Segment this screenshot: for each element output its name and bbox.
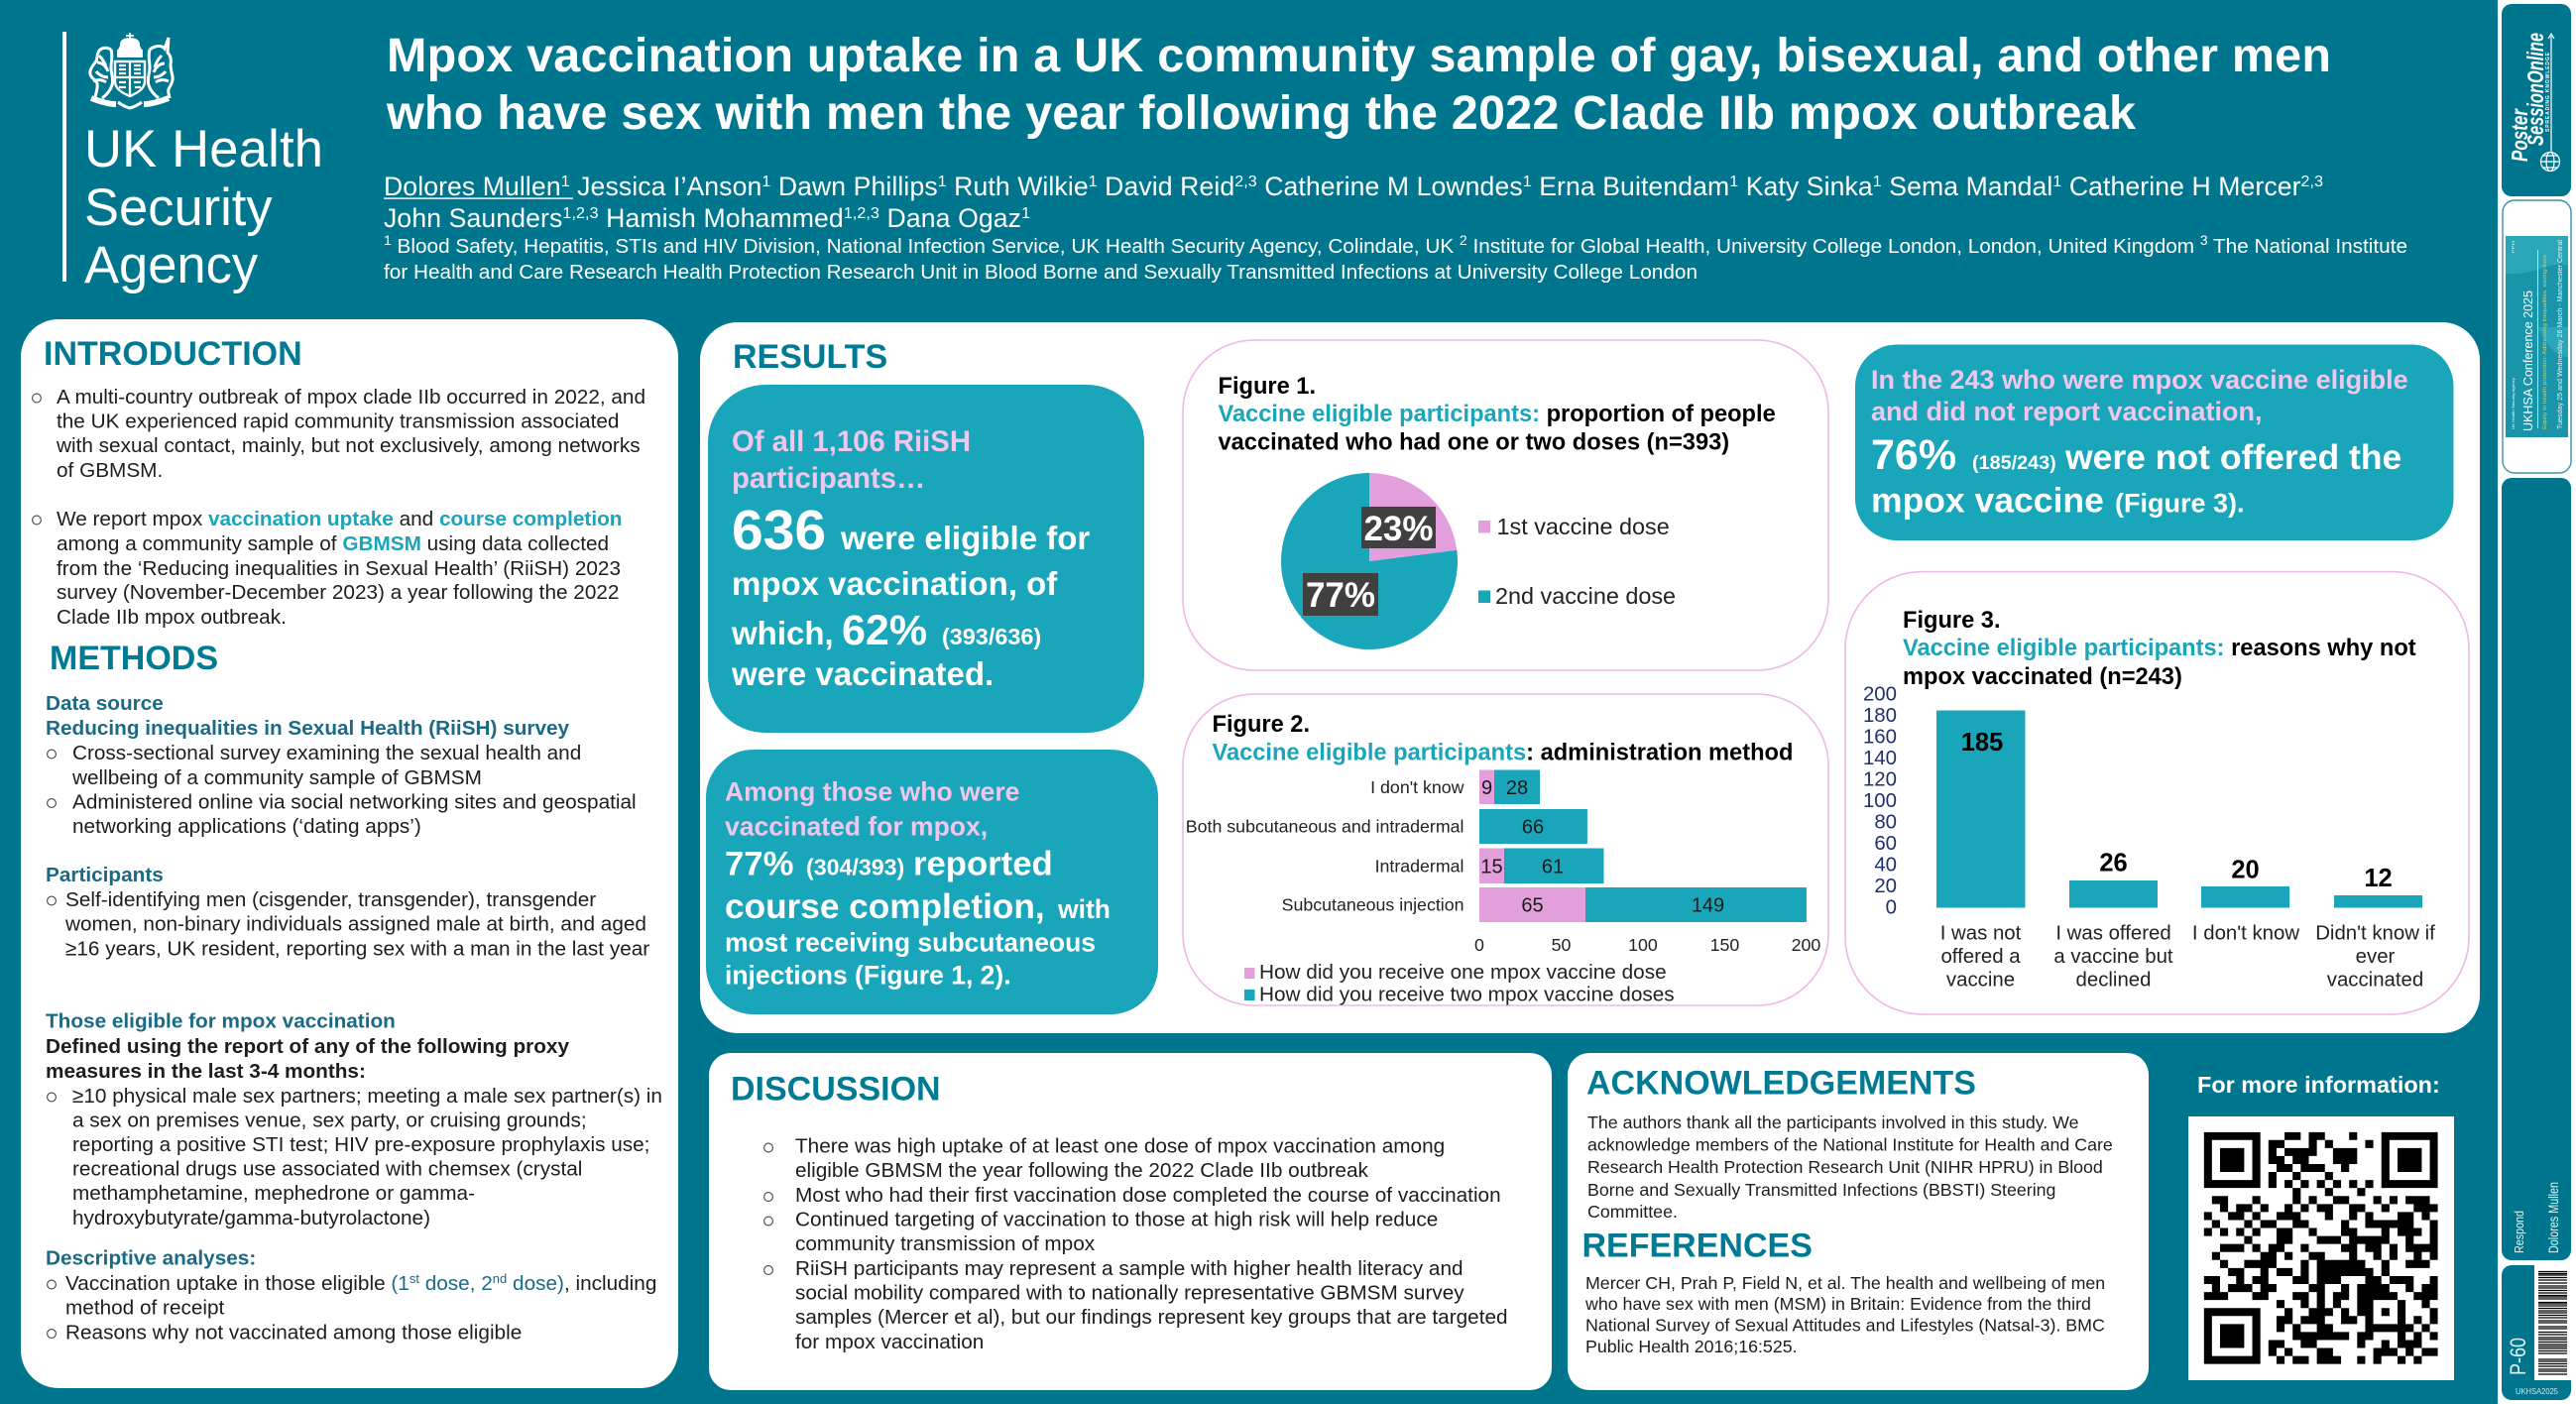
callout: 77% course completion: course completion, [725,887,1045,926]
callout: 76% not offered: (Figure 3). [2115,488,2245,518]
stacked bar chart: 0 [1474,935,1484,955]
callout: 77% course completion: (304/393) [806,855,904,880]
methods: participants: Participants [46,864,164,886]
callout: 76% not offered: In the 243 who were mpox vaccine eligible [1871,365,2408,395]
figure 1 heading: Vaccine eligible participants: proportion of people [1218,402,1776,427]
discussion bullets: Continued targeting of vaccination to those at high risk will help reduce [795,1208,1438,1231]
logo wordmark: Agency [84,236,259,294]
methods: descriptive analyses: Vaccination uptake in those eligible (1 [65,1272,410,1295]
callout: 636 eligible: (393/636) [942,624,1041,649]
references text: who have sex with men (MSM) in Britain: Evidence from the third [1584,1294,2091,1314]
bar chart: 26 [2099,849,2128,877]
authors: 1,2,3 [844,205,879,222]
figure 3 heading: mpox vaccinated (n=243) [1903,664,2182,690]
discussion bullets: RiiSH participants may represent a sample with higher health literacy and [795,1257,1464,1280]
stacked bar chart: 28 [1506,777,1528,799]
sidebar: UKHSA Conference 2025 panel [2503,200,2571,473]
bar chart: offered a [1940,946,2021,968]
methods: those eligible: Those eligible for mpox vaccination [46,1010,396,1033]
callout: 76% not offered: 76% [1871,431,1956,479]
bar chart y axis: 160 [1863,726,1897,748]
sidebar: author panel: Dolores Mullen [2545,1182,2561,1253]
figure 2 heading: Vaccine eligible participants: administration method [1212,740,1793,765]
bar chart: declined [2076,970,2151,992]
methods: descriptive analyses: , including [564,1272,656,1295]
figure 1 heading: vaccinated who had one or two doses (n=393) [1218,430,1729,456]
introduction bullets: the UK experienced rapid community transmission associated [57,410,619,432]
authors: 2,3 [2301,174,2323,190]
logo wordmark [84,120,323,294]
methods: descriptive analyses: Reasons why not vaccinated among those eligible [65,1321,522,1344]
callout: 636 eligible: 62% [842,607,927,654]
logo wordmark: Security [84,178,273,237]
panel: discussion [709,1053,1552,1390]
callout: 636 eligible: Of all 1,106 RiiSH [732,425,971,458]
bar chart: ever [2356,946,2396,968]
introduction bullets: A multi-country outbreak of mpox clade IIb occurred in 2022, and [57,386,645,409]
callout: 636 eligible: were eligible for [840,520,1090,556]
bar chart y axis: 40 [1874,855,1897,877]
bar chart: I was offered [2055,922,2171,944]
methods: those eligible: methamphetamine, mephedrone or gamma- [72,1182,475,1205]
icon: royal crest [90,33,173,108]
bar chart legend: How did you receive one mpox vaccine dose [1259,961,1667,984]
heading: results: RESULTS [733,338,887,376]
discussion bullets: social mobility compared with to nationally representative GBMSM survey [795,1281,1464,1305]
stacked bar chart: 149 [1692,894,1724,916]
conference text: Equity in health protection: Addressing inequalities, saving lives [2542,255,2548,429]
methods: those eligible [46,1010,662,1229]
sidebar: Poster Session Online logo [2502,4,2571,196]
authors: 1 [2052,174,2061,190]
acknowledgements text: Committee. [1587,1202,1678,1222]
discussion bullets: Most who had their first vaccination dose completed the course of vaccination [795,1184,1501,1207]
bar chart y axis: 60 [1874,833,1897,855]
authors: 1 [1523,174,1532,190]
callout: 77% course completion: Among those who were [725,777,1019,807]
stacked bar chart: I don't know [1370,777,1464,797]
bar chart y axis: 0 [1886,896,1897,918]
icon: globe and arrow [2540,34,2560,171]
authors: 1,2,3 [562,205,599,222]
discussion bullets: community transmission of mpox [795,1232,1096,1255]
logo text [2507,33,2551,162]
authors: Sema Mandal [1882,172,2052,201]
logo text: SPREADING KNOWLEDGE [2545,52,2551,132]
callout: 77% course completion: 77% [725,845,793,882]
authors: Catherine H Mercer [2061,172,2301,201]
methods: those eligible: reporting a positive STI test; HIV pre-exposure prophylaxis use; [72,1133,649,1156]
methods: participants: Self-identifying men (cisgender, transgender), transgender [65,888,596,911]
discussion bullets: for mpox vaccination [795,1331,984,1353]
stacked bar chart: Subcutaneous injection [1282,894,1464,914]
authors: Dolores Mullen [384,172,561,201]
authors: 1 [561,174,570,190]
callout: 76% not offered [1855,345,2453,540]
pie legend: 2nd vaccine dose [1495,583,1676,609]
figure 1 heading: Figure 1. [1218,374,1316,400]
references text: Public Health 2016;16:525. [1585,1337,1798,1356]
figure 1 heading [1218,374,1776,456]
bar chart y axis: 180 [1863,705,1897,727]
introduction bullets: of GBMSM. [57,459,163,482]
panel: figure 3 [1845,571,2469,1014]
sidebar: author panel: Respond [2512,1211,2526,1253]
introduction bullets: survey (November-December 2023) a year following the 2022 [57,581,619,604]
pie legend: 1st vaccine dose [1497,514,1670,539]
methods: those eligible: ≥10 physical male sex partners; meeting a male sex partner(s) in [72,1085,662,1108]
callout: 77% course completion: most receiving subcutaneous [725,928,1096,958]
figure 3 heading: Vaccine eligible participants: reasons why not [1903,636,2416,661]
heading: acknowledgements: ACKNOWLEDGEMENTS [1586,1065,1976,1103]
methods: descriptive analyses: Descriptive analyses: [46,1247,256,1270]
heading: methods: METHODS [50,640,218,677]
methods: participants: ≥16 years, UK resident, reporting sex with a man in the last year [65,938,649,960]
authors: 1 [1089,174,1098,190]
callout: 77% course completion: vaccinated for mpox, [725,811,988,841]
QR code [2188,1116,2454,1380]
stacked bar chart: 61 [1542,857,1564,878]
methods: data source: networking applications (‘dating apps’) [72,815,421,838]
acknowledgements text: acknowledge members of the National Institute for Health and Care [1587,1134,2113,1154]
bar chart y axis: 120 [1863,769,1897,791]
callout: 77% course completion: with [1057,894,1111,924]
bar chart legend [1244,961,1675,1005]
panel: results [700,322,2480,1033]
affiliations: Institute for Global Health, University College London, London, United Kingdom [1467,235,2200,258]
figure 3 heading: Figure 3. [1903,608,2001,634]
bar chart [1936,710,2435,992]
authors: 1 [938,174,947,190]
affiliations [384,232,2407,284]
methods: participants [46,864,649,960]
callout: 636 eligible: which, [732,615,834,651]
introduction bullets: We report mpox vaccination uptake and course completion [57,508,622,530]
callout: 77% course completion: reported [913,845,1053,882]
callout: 636 eligible: mpox vaccination, of [732,565,1058,602]
heading: discussion: DISCUSSION [731,1071,941,1109]
callout: 636 eligible [708,385,1144,733]
callout: 636 eligible: 636 [732,499,826,562]
heading: introduction: INTRODUCTION [44,335,302,373]
pie chart [1281,473,1458,649]
authors: Erna Buitendam [1532,172,1729,201]
affiliations: Blood Safety, Hepatitis, STIs and HIV Division, National Infection Service, UK Health Security Agency, Colindale, UK [392,235,1460,258]
methods: data source [46,692,637,838]
callout: 76% not offered: and did not report vaccination, [1871,397,2263,426]
conference text [2511,240,2564,431]
stacked bar chart: 15 [1480,857,1503,878]
discussion bullets: eligible GBMSM the year following the 2022 Clade IIb outbreak [795,1159,1368,1182]
stacked bar chart: 200 [1792,935,1820,955]
affiliations: for Health and Care Research Health Protection Research Unit in Blood Borne and Sexually Transmitted Infections at University College London [384,261,1698,284]
stacked bar chart [1186,769,1820,955]
stacked bar chart: 50 [1552,935,1571,955]
authors: 1 [1021,205,1030,222]
poster number: P-60 [2506,1338,2530,1375]
bar chart: vaccinated [2327,970,2423,992]
pie chart: 23% [1363,510,1434,548]
panel: figure 1 [1183,340,1828,670]
stacked bar chart: 9 [1481,777,1492,799]
callout: 636 eligible: participants… [732,462,925,495]
discussion bullets: There was high uptake of at least one dose of mpox vaccination among [795,1134,1445,1158]
methods: descriptive analyses: dose) [507,1272,564,1295]
panel: introduction and methods [21,319,678,1388]
authors: 1 [1729,174,1738,190]
authors: David Reid [1098,172,1234,201]
bar chart: I don't know [2192,922,2299,944]
methods: participants: women, non-binary individuals assigned male at birth, and aged [64,913,646,936]
bar chart y axis: 80 [1874,811,1897,833]
title: who have sex with men the year following the 2022 Clade IIb mpox outbreak [386,86,2137,140]
stacked bar chart: 66 [1522,817,1544,839]
conference text: Tuesday 25 and Wednesday 26 March - Manchester Central [2557,240,2564,429]
heading: for more information: For more information: [2197,1072,2440,1098]
references text: National Survey of Sexual Attitudes and Lifestyles (Natsal-3). BMC [1585,1315,2105,1335]
barcode [2538,1271,2567,1374]
authors: 1 [1873,174,1882,190]
acknowledgements text [1587,1112,2113,1222]
title [386,29,2331,140]
bar chart: a vaccine but [2053,946,2173,968]
bar chart: 185 [1961,729,2003,757]
conference text: FPH [2511,241,2516,253]
sidebar: poster number and barcode [2502,1265,2572,1400]
pie legend [1478,514,1676,609]
authors: Jessica I’Anson [570,172,761,201]
references text: Mercer CH, Prah P, Field N, et al. The health and wellbeing of men [1585,1273,2105,1293]
stacked bar chart: 150 [1710,935,1739,955]
introduction bullets: Clade IIb mpox outbreak. [57,606,287,629]
methods: data source: Reducing inequalities in Sexual Health (RiiSH) survey [46,717,570,740]
discussion bullets: samples (Mercer et al), but our findings represent key groups that are targeted [795,1306,1508,1329]
sidebar: author panel [2502,478,2571,1260]
bar chart y axis [1863,684,1897,918]
bar chart y axis: 100 [1863,790,1897,812]
callout: 76% not offered: (185/243) [1972,452,2056,474]
introduction bullets: with sexual contact, mainly, but not exclusively, among networks [56,434,641,457]
methods: those eligible: a sex on premises venue, sex party, or cruising grounds; [72,1110,587,1132]
methods: data source: Administered online via social networking sites and geospatial [72,791,637,813]
bar chart: vaccine [1946,970,2015,992]
bar chart: I was not [1940,922,2022,944]
introduction bullets: among a community sample of GBMSM using data collected [57,532,609,555]
callout: 76% not offered: were not offered the [2064,437,2401,477]
stacked bar chart: 65 [1521,894,1544,916]
methods: data source: Data source [46,692,164,715]
authors: Ruth Wilkie [947,172,1089,201]
callout: 77% course completion [706,750,1158,1014]
authors: 2,3 [1234,174,1257,190]
title: Mpox vaccination uptake in a UK community sample of gay, bisexual, and other men [387,29,2331,82]
affiliations: 1 [384,232,392,248]
authors: Dawn Phillips [770,172,938,201]
authors: 1 [761,174,770,190]
affiliations: The National Institute [2208,235,2407,258]
methods: descriptive analyses: nd [493,1271,507,1286]
bar chart y axis: 20 [1874,876,1897,897]
methods: descriptive analyses: method of receipt [65,1297,225,1320]
conference text: UK Health Security Agency [2512,378,2516,429]
callout: 76% not offered: mpox vaccine [1871,480,2104,520]
figure 2 heading: Figure 2. [1212,712,1310,738]
logo wordmark: UK Health [84,120,323,178]
bar chart: Didn't know if [2315,922,2435,944]
callout: 77% course completion: injections (Figure 1, 2). [725,960,1011,990]
acknowledgements text: The authors thank all the participants involved in this study. We [1587,1112,2079,1132]
stacked bar chart: Both subcutaneous and intradermal [1186,817,1464,837]
affiliations: 2 [1460,232,1467,248]
methods: those eligible: hydroxybutyrate/gamma-butyrolactone) [72,1207,430,1229]
heading: references: REFERENCES [1582,1228,1813,1265]
authors: Catherine M Lowndes [1257,172,1523,201]
bar chart y axis: 140 [1863,748,1897,769]
references text [1584,1273,2105,1356]
callout: 636 eligible: were vaccinated. [731,655,994,692]
methods: those eligible: Defined using the report of any of the following proxy [46,1035,569,1058]
introduction bullets: from the ‘Reducing inequalities in Sexual Health’ (RiiSH) 2023 [57,557,621,580]
acknowledgements text: Borne and Sexually Transmitted Infections (BBSTI) Steering [1587,1180,2055,1200]
conference code: UKHSA2025 [2516,1387,2559,1396]
authors: John Saunders [384,203,562,233]
methods: data source: wellbeing of a community sample of GBMSM [71,766,482,789]
bar chart legend: How did you receive two mpox vaccine doses [1259,984,1675,1005]
panel: acknowledgements and references [1568,1053,2149,1390]
panel: figure 2 [1183,694,1828,1005]
discussion bullets [764,1134,1508,1353]
stacked bar chart: Intradermal [1375,857,1464,877]
bar chart y axis: 200 [1863,684,1897,706]
logo text: Poster [2507,108,2532,162]
acknowledgements text: Research Health Protection Research Unit (NIHR HPRU) in Blood [1587,1157,2103,1177]
introduction bullets [33,386,645,629]
figure 2 heading [1212,712,1793,765]
logo: UK Health Security Agency [62,32,323,294]
methods: descriptive analyses: dose, 2 [419,1272,493,1295]
authors: Katy Sinka [1738,172,1873,201]
authors: Dana Ogaz [879,203,1021,233]
authors: Hamish Mohammed [599,203,844,233]
methods: data source: Cross-sectional survey examining the sexual health and [72,742,581,764]
figure 3 heading [1903,608,2416,690]
affiliations: 3 [2200,232,2208,248]
pie chart: 77% [1306,576,1375,615]
stacked bar chart: 100 [1628,935,1658,955]
methods: those eligible: measures in the last 3-4 months: [46,1060,366,1083]
authors [384,172,2323,233]
bar chart: 12 [2364,865,2393,892]
methods: descriptive analyses: st [410,1271,419,1286]
bar chart: 20 [2231,857,2260,884]
methods: those eligible: recreational drugs use associated with chemsex (crystal [72,1158,582,1180]
conference text: UKHSA Conference 2025 [2521,291,2535,431]
methods: descriptive analyses [46,1247,656,1344]
